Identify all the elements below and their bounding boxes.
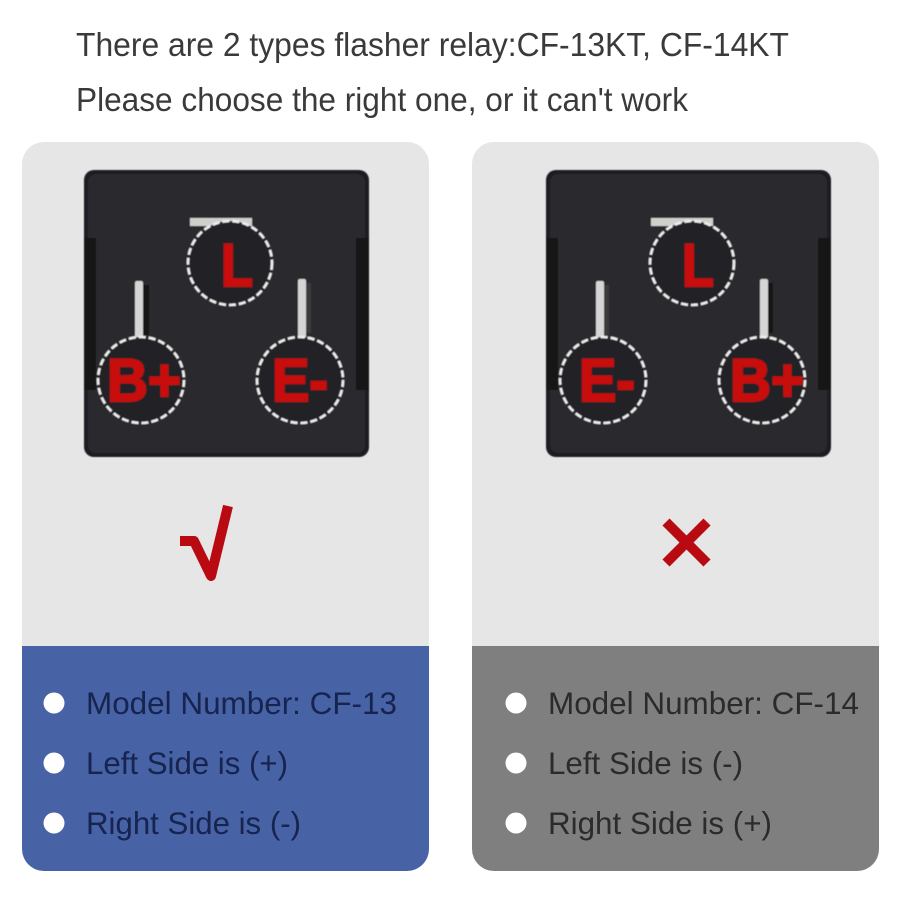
info block: CF-13: Model Number: CF-13 <box>86 685 397 721</box>
relay: CF-13: B+ <box>107 347 181 414</box>
relay: CF-14: L <box>682 232 714 299</box>
info block: CF-14: Right Side is (+) <box>548 805 772 841</box>
panel: CF-13 correct <box>22 142 429 871</box>
info block: CF-13: Right Side is (-) <box>86 805 301 841</box>
relay: CF-14: B+ <box>730 347 804 414</box>
info block: CF-13: Left Side is (+) <box>86 745 288 781</box>
relay: CF-14 <box>546 170 831 457</box>
relay: CF-13 <box>84 170 369 457</box>
heading <box>76 26 789 118</box>
relay: CF-13: E- <box>272 347 328 414</box>
info block: CF-13 <box>22 646 429 871</box>
panel background: right <box>472 142 879 646</box>
info block: CF-14: Model Number: CF-14 <box>548 685 859 721</box>
heading: There are 2 types flasher relay:CF-13KT, CF-14KT <box>76 26 789 63</box>
icon: cross mark <box>666 522 707 563</box>
info block: CF-14: Left Side is (-) <box>548 745 743 781</box>
icon: check mark <box>180 506 228 576</box>
panel: CF-14 wrong <box>472 142 879 871</box>
heading: Please choose the right one, or it can't work <box>76 81 688 118</box>
relay: CF-14: E- <box>579 347 635 414</box>
panel background: left <box>22 142 429 646</box>
relay: CF-13: L <box>221 232 253 299</box>
info block: CF-14 <box>472 646 879 871</box>
